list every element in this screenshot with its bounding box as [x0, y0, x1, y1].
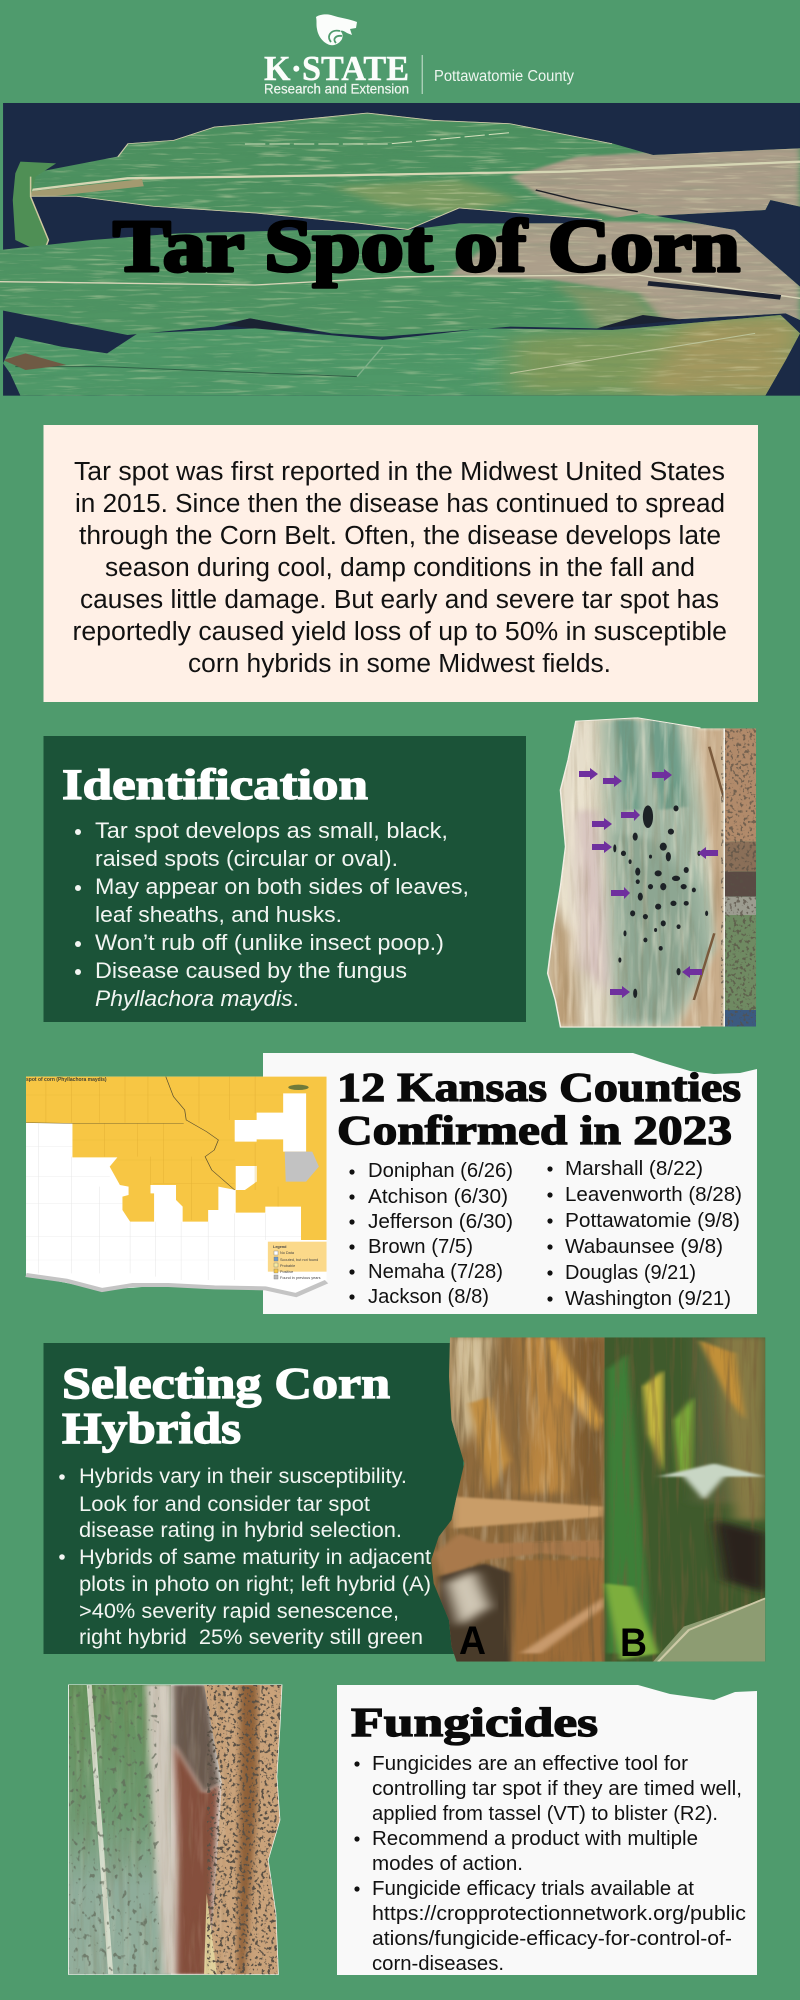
county list: second column: [547, 1158, 742, 1310]
photo: tar spot leaves and husk: [69, 1685, 283, 1975]
icon: purple arrows: [579, 768, 718, 998]
county list: first column: Brown (7/5): [368, 1236, 473, 1258]
map legend: Positive: [280, 1270, 293, 1274]
hybrids bullets: Hybrids vary in their susceptibility.: [79, 1464, 407, 1488]
panel: Kansas counties confirmed: [263, 1053, 757, 1314]
hybrids heading: [62, 1359, 390, 1453]
right strip of other photos: [724, 728, 756, 842]
identification bullets: [75, 818, 469, 1011]
dark gaps between leaves: [224, 315, 684, 332]
panel: identification: [44, 736, 526, 1022]
fungicides bullets: Fungicides are an effective tool for: [372, 1753, 688, 1775]
hybrids heading: Selecting Corn: [62, 1359, 390, 1408]
tar spots: [613, 805, 708, 998]
banner photo of corn leaves: [0, 103, 800, 397]
K-STATE wordmark: K·STATE: [264, 49, 409, 88]
map legend: Found in previous years: [280, 1276, 321, 1280]
photo label A: A: [459, 1619, 486, 1663]
hybrids bullets: Look for and consider tar spot: [79, 1492, 370, 1516]
hybrids bullets: right hybrid 25% severity still green: [79, 1625, 423, 1649]
map legend: Legend: [273, 1245, 287, 1249]
photo: hybrids A and B: [429, 1337, 768, 1665]
county list: first column: Atchison (6/30): [368, 1186, 508, 1208]
county name: Pottawatomie County: [434, 68, 574, 85]
intro text: through the Corn Belt. Often, the disease develops late: [79, 522, 721, 550]
counties heading: Confirmed in 2023: [337, 1107, 732, 1153]
identification bullets: May appear on both sides of leaves,: [95, 874, 469, 899]
map: Kansas county tar spot status: [26, 1077, 327, 1295]
identification bullets: Phyllachora maydis .: [95, 986, 299, 1011]
icon: wildcat logo: [316, 14, 357, 45]
intro panel: [44, 425, 758, 702]
hybrids bullets: plots in photo on right; left hybrid (A): [79, 1572, 431, 1596]
hybrids bullets: [59, 1464, 431, 1649]
logo divider: [422, 55, 423, 94]
fungicides bullets: modes of action.: [372, 1853, 523, 1875]
photo label B: B: [620, 1621, 647, 1665]
leaf: middle: [0, 210, 800, 340]
research and extension line: Research and Extension: [264, 82, 409, 96]
fungicides bullets: [354, 1753, 746, 1975]
identification bullets: Disease caused by the fungus: [95, 958, 407, 983]
intro text: Tar spot was first reported in the Midwest United States: [74, 458, 725, 486]
counties heading: 12 Kansas Counties: [337, 1064, 741, 1110]
panel: fungicides: [337, 1685, 757, 1975]
identification bullets: Tar spot develops as small, black,: [95, 818, 448, 843]
county list: first column: Jefferson (6/30): [368, 1211, 513, 1233]
panel: selecting corn hybrids: [44, 1337, 768, 1665]
county list: second column: Pottawatomie (9/8): [565, 1210, 740, 1232]
counties heading: [337, 1064, 741, 1153]
leaf: folded end: [13, 162, 56, 253]
fungicides bullets: Fungicide efficacy trials available at: [372, 1878, 694, 1900]
map legend: Scouted, but not found: [280, 1258, 318, 1262]
map legend: No Data: [280, 1251, 295, 1255]
county list: first column: Jackson (8/8): [368, 1286, 489, 1308]
identification bullets: leaf sheaths, and husks.: [95, 902, 342, 927]
county list: second column: Washington (9/21): [565, 1288, 731, 1310]
intro text: corn hybrids in some Midwest fields.: [188, 650, 611, 678]
intro text: in 2015. Since then the disease has continued to spread: [75, 490, 725, 518]
identification bullets: raised spots (circular or oval).: [95, 846, 398, 871]
fungicides bullets: controlling tar spot if they are timed well,: [372, 1778, 742, 1800]
fungicides bullets: corn-diseases.: [372, 1953, 504, 1975]
county list: first column: Nemaha (7/28): [368, 1261, 503, 1283]
map legend: [273, 1245, 321, 1280]
county list: second column: Leavenworth (8/28): [565, 1184, 742, 1206]
hybrids heading: Hybrids: [62, 1404, 241, 1453]
hybrids bullets: disease rating in hybrid selection.: [79, 1518, 402, 1542]
fungicides bullets: Recommend a product with multiple: [372, 1828, 698, 1850]
fungicides bullets: applied from tassel (VT) to blister (R2).: [372, 1803, 718, 1825]
leaf: bottom: [0, 313, 800, 397]
identification bullets: Won’t rub off (unlike insect poop.): [95, 930, 444, 955]
intro text: reportedly caused yield loss of up to 50% in susceptible: [72, 618, 727, 646]
map legend: Probable: [280, 1264, 295, 1268]
intro text: causes little damage. But early and severe tar spot has: [80, 586, 719, 614]
county list: second column: Douglas (9/21): [565, 1262, 696, 1284]
right half of photo: green hybrid: [605, 1337, 768, 1663]
county list: second column: Marshall (8/22): [565, 1158, 703, 1180]
fungicides heading: Fungicides: [351, 1699, 598, 1745]
K-State logo header: [264, 14, 574, 96]
fungicides bullets: https://cropprotectionnetwork.org/public: [372, 1903, 746, 1925]
fungicides bullets: ations/fungicide-efficacy-for-control-of-: [372, 1928, 732, 1950]
title: Tar Spot of Corn: [113, 206, 740, 288]
intro text: season during cool, damp conditions in the fall and: [105, 554, 695, 582]
county list: first column: [349, 1160, 513, 1308]
map title: spot of corn (Phyllachora maydis): [26, 1077, 107, 1083]
photo: tar spot on leaf with arrows: [546, 717, 756, 1030]
hybrids bullets: >40% severity rapid senescence,: [79, 1599, 399, 1623]
intro text: [72, 458, 727, 678]
county list: first column: Doniphan (6/26): [368, 1160, 513, 1182]
hybrids bullets: Hybrids of same maturity in adjacent: [79, 1545, 431, 1569]
leaf: top: [0, 110, 800, 233]
identification heading: Identification: [62, 762, 368, 809]
county list: second column: Wabaunsee (9/8): [565, 1236, 723, 1258]
